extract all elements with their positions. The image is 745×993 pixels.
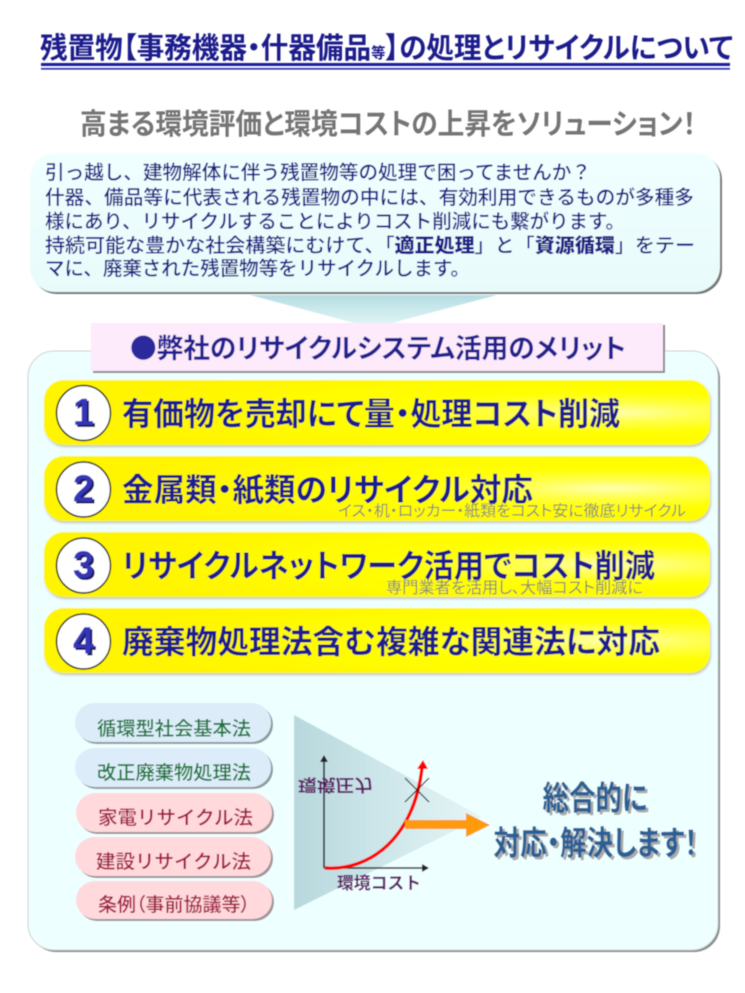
callout: solution: 総合的に [545,782,650,819]
arrow: to solution [405,813,490,837]
pill: 改正廃棄物処理法: 改正廃棄物処理法 [97,762,251,784]
panel: intro text box: マに、廃棄された残置物等をリサイクルします。 [45,258,470,280]
merit 3: 専門業者を活用し、大幅コスト削減に [386,579,643,597]
merit 3: 3 [75,546,96,588]
panel: intro text box: 持続可能な豊かな社会構築にむけて、「 適正処理」と「資源循環」をテー [45,234,695,257]
merit 2: 2 [73,468,94,510]
arrow: funnel from intro to merits [250,295,497,328]
pill: 改正廃棄物処理法 [75,748,273,789]
merit 2: 金属類・紙類のリサイクル対応 [122,472,533,508]
pill: 建設リサイクル法: 建設リサイクル法 [96,851,251,873]
panel: intro text box: 引っ越し、建物解体に伴う残置物等の処理で困ってませんか？ [45,162,591,184]
chart: environmental pressure versus cost: 環境圧力 [298,775,373,794]
pill: 家電リサイクル法: 家電リサイクル法 [98,807,253,829]
panel: intro text box: 什器、備品等に代表される残置物の中には、有効利用できるものが多種多 [45,187,694,209]
merit 4: 4 [75,622,96,664]
merit 1 [44,380,711,447]
callout: solution: 対応・解決します！ [494,824,698,862]
merit 4: 4 [73,620,94,662]
merit 4 [44,608,711,675]
callout: solution: 総合的に [542,780,648,816]
pill: 建設リサイクル法 [75,837,273,878]
callout: solution [494,780,700,864]
subtitle: 高まる環境評価と環境コストの上昇をソリューション！ [80,108,696,141]
pill: 循環型社会基本法 [75,703,273,744]
merit 2: 2 [75,470,96,512]
heading: merits: ●弊社のリサイクルシステム活用のメリット [130,327,626,366]
callout: solution: 対応・解決します！ [496,827,700,864]
pill: 循環型社会基本法: 循環型社会基本法 [97,718,251,740]
merit 4: 廃棄物処理法含む複雑な関連法に対応 [122,624,660,660]
panel: intro text box: 様にあり、リサイクルすることによりコスト削減にも繋がります。 [45,211,625,233]
merit 3 [44,532,711,599]
pill: 家電リサイクル法 [76,793,274,834]
merit 2: イス・机・ロッカー・紙類をコスト安に徹底リサイクル [338,502,686,520]
pill: 条例（事前協議等） [76,881,274,921]
merit 3: リサイクルネットワーク活用でコスト削減 [122,548,655,584]
merit 1: 1 [73,392,94,434]
panel: merits [28,323,720,952]
panel: intro text box [30,153,722,294]
merit 1: 1 [75,394,96,436]
merit 3: 3 [73,544,94,586]
chart: environmental pressure versus cost: 環境コスト [337,874,421,893]
chart: environmental pressure versus cost [294,715,482,910]
title: 残置物【事務機器・什器備品等】の処理とリサイクルについて [40,32,733,65]
merit 2 [44,456,711,523]
heading: merits [91,323,665,373]
pill: 条例（事前協議等）: 条例（事前協議等） [98,894,250,916]
merit 1: 有価物を売却にて量・処理コスト削減 [122,396,620,432]
